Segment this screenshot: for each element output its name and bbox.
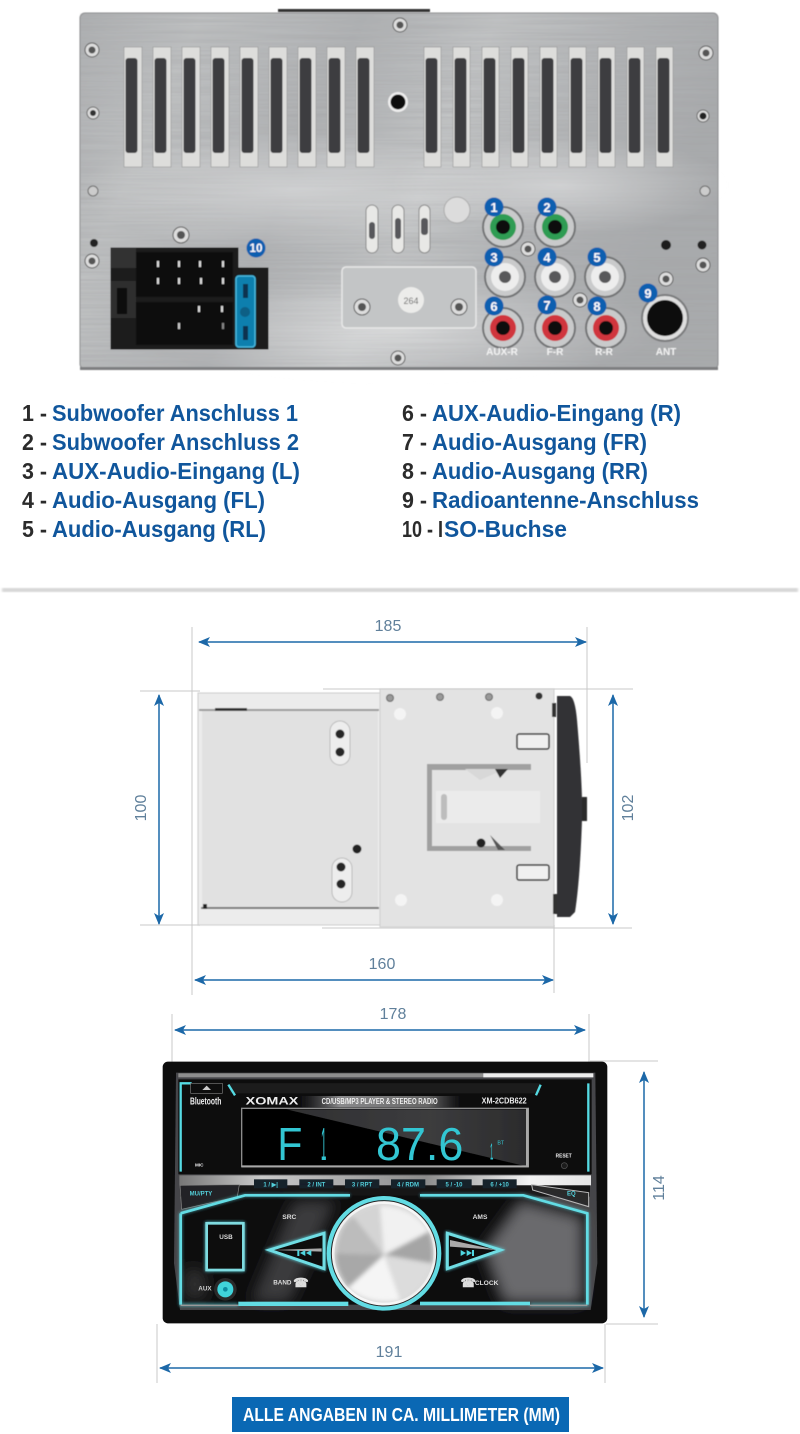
preset strip: 3 / RPT xyxy=(352,1182,372,1188)
jack: red front right xyxy=(535,308,575,348)
display: F xyxy=(277,1118,302,1170)
AUX port: AUX xyxy=(198,1285,212,1292)
brand and product text: CD/USB/MP3 PLAYER & STEREO RADIO xyxy=(322,1097,438,1106)
display: BT xyxy=(497,1140,505,1146)
control labels: SRC xyxy=(282,1214,297,1221)
jack labels: F-R xyxy=(547,347,564,358)
numbered badges: 6 xyxy=(490,299,498,314)
jack labels: R-R xyxy=(595,347,614,358)
jack: white front left xyxy=(535,257,575,297)
previous button xyxy=(269,1233,324,1269)
legend item 9: Radioantenne-Anschluss xyxy=(432,487,699,513)
radio front face xyxy=(163,1062,607,1323)
cyan top frame xyxy=(181,1083,588,1172)
jack: green subwoofer 2 xyxy=(535,207,575,247)
brand and product text: Bluetooth xyxy=(190,1097,221,1108)
legend item 8: Audio-Ausgang (RR) xyxy=(432,458,648,484)
antenna socket xyxy=(642,295,688,341)
dimension 185: 185 xyxy=(375,618,401,635)
footer note: ALLE ANGABEN IN CA. MILLIMETER (MM) xyxy=(243,1405,560,1425)
preset strip: 4 / RDM xyxy=(397,1182,419,1188)
jack labels: AUX-R xyxy=(486,347,519,358)
numbered badges: 8 xyxy=(593,299,601,314)
brand and product text: MIC xyxy=(195,1162,204,1167)
dimension 160: 160 xyxy=(369,956,395,973)
jack: white rear left xyxy=(585,257,625,297)
dimension 114: 114 xyxy=(651,1175,668,1201)
display: 1 xyxy=(321,1118,326,1170)
jack: white AUX L xyxy=(485,257,525,297)
numbered badges: 7 xyxy=(543,298,551,313)
numbered badges: 9 xyxy=(644,286,652,301)
control labels: CLOCK xyxy=(475,1280,499,1287)
lower control section xyxy=(181,1195,587,1306)
numbered badges: 3 xyxy=(490,250,498,265)
legend item 5: Audio-Ausgang (RL) xyxy=(52,516,266,542)
legend item 10: SO-Buchse xyxy=(444,516,567,542)
screws and holes xyxy=(85,18,713,365)
preset strip: EQ xyxy=(567,1192,576,1198)
metal chassis plate xyxy=(80,9,730,385)
brand and product text: RESET xyxy=(556,1153,572,1159)
dimension guide lines xyxy=(157,1014,658,1383)
jack: red rear right xyxy=(586,308,626,348)
numbered badges xyxy=(246,198,658,316)
control labels: BAND xyxy=(273,1280,292,1287)
brand and product text: XOMAX xyxy=(246,1096,300,1108)
legend item 7: 7 - xyxy=(402,429,427,455)
preset strip: 1 / ▶| xyxy=(263,1181,278,1188)
display: 87.6 xyxy=(376,1118,463,1170)
ISO connector xyxy=(111,248,268,349)
brand and product text: XM-2CDB622 xyxy=(482,1096,527,1105)
small slots and sticker xyxy=(366,197,470,253)
preset strip: 2 / INT xyxy=(307,1182,326,1188)
control labels xyxy=(273,1214,499,1290)
legend item 3: 3 - xyxy=(22,458,47,484)
side view with dimensions xyxy=(133,618,637,995)
legend item 5: 5 - xyxy=(22,516,47,542)
preset strip: MU/PTY xyxy=(190,1190,213,1197)
numbered badges: 2 xyxy=(543,200,551,215)
legend item 4: Audio-Ausgang (FL) xyxy=(52,487,265,513)
display: 1 xyxy=(490,1138,493,1164)
jack labels: ANT xyxy=(656,347,676,358)
next button xyxy=(447,1233,501,1269)
legend item 7: Audio-Ausgang (FR) xyxy=(432,429,647,455)
radio body side xyxy=(198,689,587,927)
jack labels xyxy=(486,347,676,358)
USB port xyxy=(207,1223,243,1270)
ventilation slots xyxy=(124,47,673,167)
legend item 1: 1 - xyxy=(22,400,47,426)
legend item 2: Subwoofer Anschluss 2 xyxy=(52,429,299,455)
cover plate with two screws: 264 xyxy=(403,296,419,306)
legend item 6: 6 - xyxy=(402,400,427,426)
control labels: AMS xyxy=(473,1214,488,1221)
jack: green subwoofer 1 xyxy=(483,207,523,247)
panel: rear side of the radio xyxy=(80,9,730,385)
cover plate with two screws xyxy=(342,267,476,328)
legend item 3: AUX-Audio-Eingang (L) xyxy=(52,458,300,484)
AUX port xyxy=(198,1278,237,1301)
dimension guide lines xyxy=(140,627,633,995)
eject button xyxy=(191,1083,222,1093)
dimension 102: 102 xyxy=(620,795,637,821)
numbered badges: 4 xyxy=(543,250,551,265)
dimension 100: 100 xyxy=(133,795,150,821)
numbered badges: 10 xyxy=(250,241,263,255)
control labels: ☎ xyxy=(293,1276,309,1290)
legend item 9: 9 - xyxy=(402,487,427,513)
preset strip: 5 / -10 xyxy=(446,1182,463,1188)
legend item 10: 10 - I xyxy=(402,516,443,542)
footer note xyxy=(232,1397,569,1432)
jack: red AUX R xyxy=(483,308,523,348)
dimension 191: 191 xyxy=(376,1344,402,1361)
product band reflection xyxy=(300,1096,460,1107)
volume knob xyxy=(327,1196,441,1311)
legend item 4: 4 - xyxy=(22,487,47,513)
USB port: USB xyxy=(219,1234,233,1241)
front view with dimensions xyxy=(157,1006,668,1383)
blue fuse xyxy=(236,276,255,347)
dimension 178: 178 xyxy=(380,1006,406,1023)
legend item 2: 2 - xyxy=(22,429,47,455)
preset strip xyxy=(179,1175,591,1209)
display xyxy=(242,1108,529,1170)
preset strip: 6 / +10 xyxy=(490,1182,510,1188)
numbered badges: 1 xyxy=(490,200,498,215)
control labels: ☎ xyxy=(460,1276,476,1290)
legend item 1: Subwoofer Anschluss 1 xyxy=(52,400,298,426)
connector legend xyxy=(22,400,699,542)
legend item 6: AUX-Audio-Eingang (R) xyxy=(432,400,681,426)
brand and product text xyxy=(190,1096,572,1167)
numbered badges: 5 xyxy=(593,250,601,265)
legend item 8: 8 - xyxy=(402,458,427,484)
